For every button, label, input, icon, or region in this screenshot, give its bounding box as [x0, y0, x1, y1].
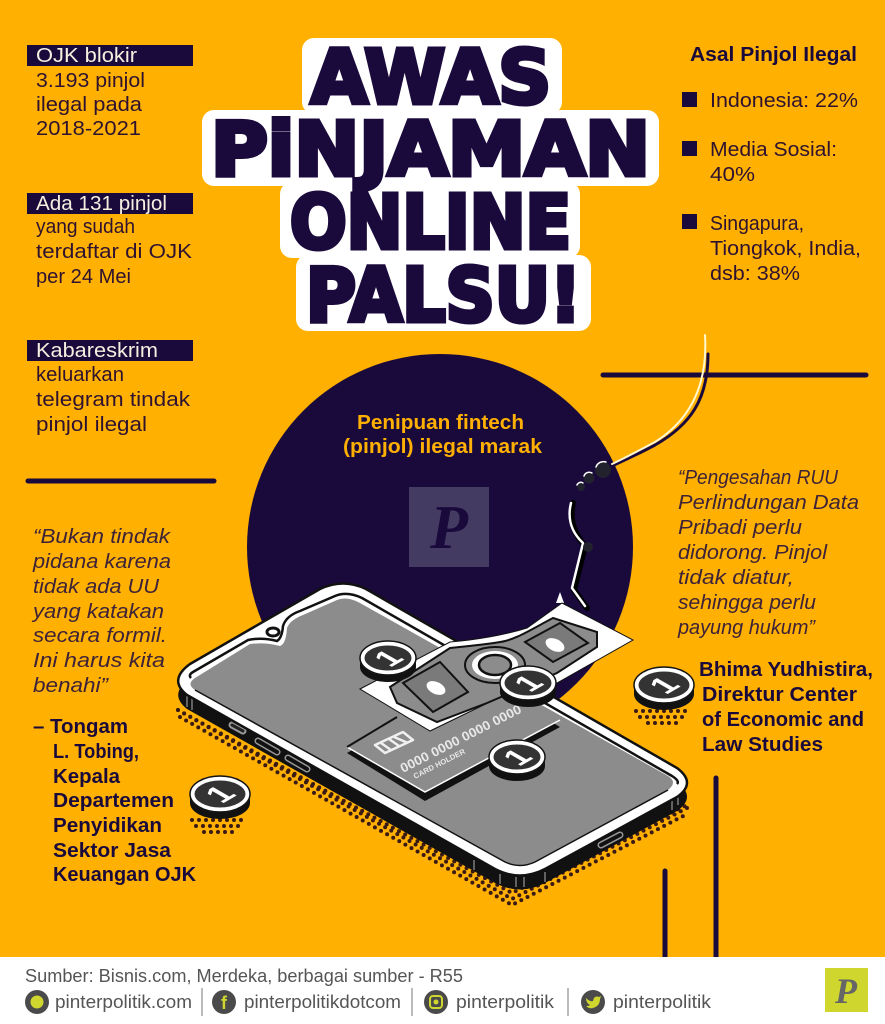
quote left [31, 526, 171, 697]
panel: asal pinjol ilegal: dsb: 38% [710, 263, 800, 285]
coin right: 1 [641, 672, 687, 698]
attribution right: Bhima Yudhistira, [699, 659, 873, 681]
phone side buttons [232, 725, 620, 845]
card: 0000 0000 0000 0000 [398, 701, 524, 776]
fact: OJK blokir: OJK blokir [36, 45, 137, 67]
panel: asal pinjol ilegal: Tiongkok, India, [710, 238, 861, 260]
phone body [178, 598, 687, 890]
quote left: Ini harus kita [33, 650, 165, 672]
coin on phone top [360, 641, 416, 682]
logo [825, 968, 868, 1012]
fact: OJK blokir: 2018-2021 [36, 118, 141, 140]
logo: P [834, 971, 858, 1011]
title: ONLINE [290, 180, 571, 266]
coin left [190, 776, 250, 832]
source line: Sumber: Bisnis.com, Merdeka, berbagai sumber - R55 [25, 965, 463, 986]
fact: Kabareskrim [27, 340, 193, 436]
coin left: 1 [197, 781, 243, 807]
quote left: “Bukan tindak [33, 526, 171, 548]
quote left: yang katakan [31, 601, 164, 623]
phone edge ticks [187, 695, 678, 887]
card chip [375, 732, 413, 753]
quote right: didorong. Pinjol [678, 542, 828, 564]
quote right: Pribadi perlu [678, 517, 802, 539]
attribution left: L. Tobing, [53, 741, 139, 763]
quote left: benahi” [33, 675, 110, 697]
social: instagram [424, 990, 555, 1014]
attribution left: Keuangan OJK [53, 864, 197, 886]
panel: asal pinjol ilegal: Indonesia: 22% [710, 90, 858, 112]
fact: Kabareskrim: keluarkan [36, 364, 124, 386]
coin on card: 1 [495, 744, 540, 770]
fact: Ada 131 pinjol: terdaftar di OJK [36, 241, 193, 263]
attribution right: Law Studies [702, 734, 823, 756]
attribution left [33, 716, 197, 886]
attribution right: of Economic and [702, 709, 864, 731]
attribution left: Kepala [53, 766, 121, 788]
quote left: pidana karena [32, 551, 171, 573]
circle caption: Penipuan fintech [357, 412, 524, 434]
quote right: tidak diatur, [678, 567, 794, 589]
phone screen [190, 599, 673, 866]
coin on card [489, 740, 545, 781]
social: twitter: pinterpolitik [613, 991, 712, 1012]
footer [0, 957, 885, 1024]
coin right [634, 667, 694, 723]
card [347, 672, 560, 801]
attribution right [699, 659, 873, 756]
fact: Ada 131 pinjol [27, 193, 193, 288]
fact: Ada 131 pinjol: per 24 Mei [36, 266, 131, 288]
title: AWAS [311, 35, 551, 121]
attribution left: Sektor Jasa [53, 840, 172, 862]
camera [267, 628, 279, 636]
quote right [677, 467, 859, 639]
panel: asal pinjol ilegal: 40% [710, 164, 755, 186]
coin on banknote [500, 666, 556, 707]
quote right: Perlindungan Data [678, 492, 859, 514]
attribution right: Direktur Center [702, 684, 857, 706]
social: website: pinterpolitik.com [55, 991, 192, 1012]
quote left: secara formil. [33, 625, 167, 647]
social: facebook: f [221, 993, 228, 1013]
panel: asal pinjol ilegal: Asal Pinjol Ilegal [690, 44, 857, 66]
fact: Ada 131 pinjol: Ada 131 pinjol [36, 193, 167, 215]
coin on banknote: 1 [506, 670, 551, 696]
attribution left: Departemen [53, 790, 174, 812]
banknote [360, 603, 633, 731]
circle caption [343, 412, 543, 458]
attribution left: Penyidikan [53, 815, 162, 837]
title: PiNJAMAN [211, 107, 650, 193]
social: facebook: pinterpolitikdotcom [244, 991, 401, 1012]
fact: Kabareskrim: telegram tindak [36, 389, 191, 411]
quote right: sehingga perlu [678, 592, 816, 614]
quote left: tidak ada UU [33, 576, 160, 598]
fact: OJK blokir: ilegal pada [36, 94, 143, 116]
fact: Kabareskrim: Kabareskrim [36, 340, 158, 362]
phone face [178, 584, 687, 876]
watermark logo [409, 487, 489, 567]
navy circle [247, 354, 633, 740]
title: PALSU! [306, 253, 581, 339]
panel: asal pinjol ilegal: Media Sosial: [710, 139, 837, 161]
phone dotted shadow [178, 710, 687, 905]
fact: Ada 131 pinjol: yang sudah [36, 216, 135, 238]
panel: asal pinjol ilegal: Singapura, [710, 213, 804, 235]
fishing line and hook [556, 335, 708, 608]
decorative lines [28, 375, 866, 958]
phone illustration [178, 584, 687, 890]
attribution left: – Tongam [33, 716, 128, 738]
card: CARD HOLDER [412, 747, 467, 781]
social: instagram: pinterpolitik [456, 991, 555, 1012]
circle caption: (pinjol) ilegal marak [343, 436, 543, 458]
quote right: payung hukum” [677, 617, 816, 639]
coin on phone top: 1 [366, 645, 411, 671]
quote right: “Pengesahan RUU [678, 467, 839, 489]
watermark logo: P [429, 494, 469, 562]
fact: Kabareskrim: pinjol ilegal [36, 414, 147, 436]
fact: OJK blokir: 3.193 pinjol [36, 70, 145, 92]
social: twitter [581, 990, 712, 1014]
panel: asal pinjol ilegal [682, 44, 861, 285]
title [202, 35, 659, 339]
fact: OJK blokir [27, 45, 193, 140]
